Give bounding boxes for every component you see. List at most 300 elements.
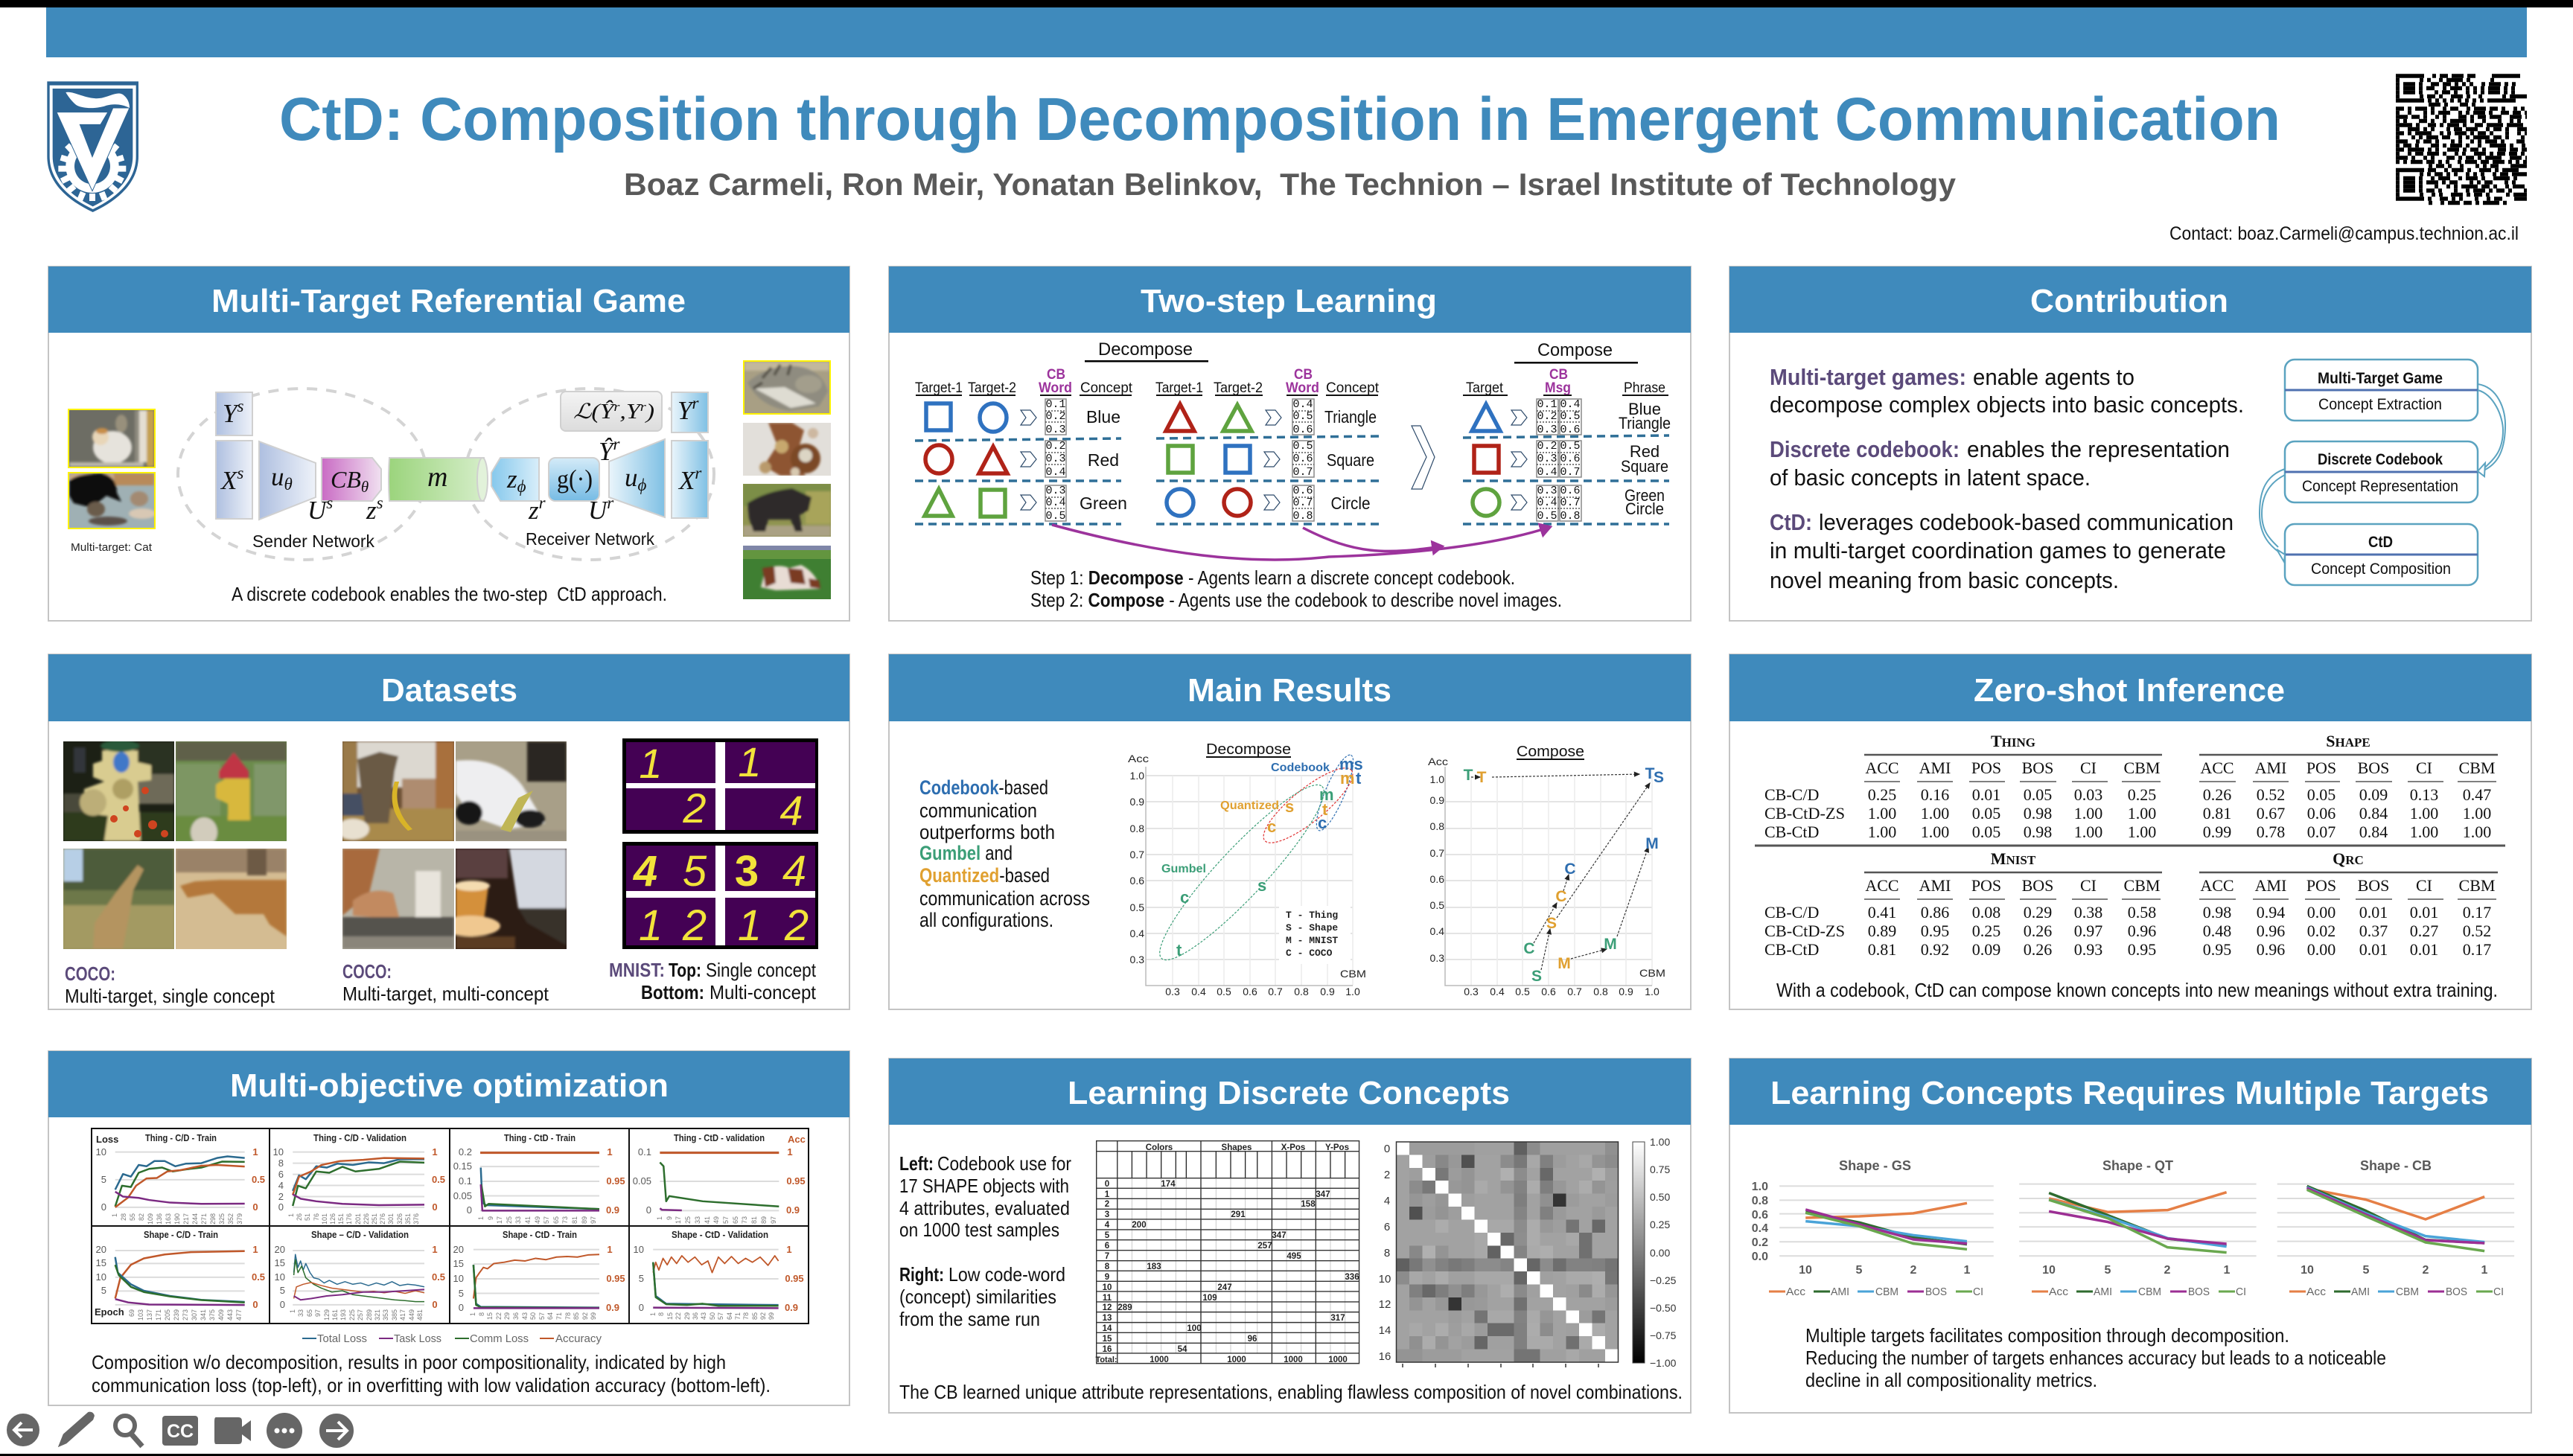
caption: COCO multi concept: [342, 960, 549, 1005]
caption: COCO single concept: COCO:: [65, 962, 115, 985]
arrow: curved flow right: [2478, 384, 2505, 476]
math labels: r: [539, 494, 546, 512]
chart image: MNIST single concept: [622, 738, 818, 834]
epoch tick labels: 1: [477, 1216, 485, 1220]
table: codebook usage: Shapes: [1222, 1143, 1252, 1152]
results table: 1.00: [2463, 823, 2491, 841]
point labels: C: [1523, 940, 1535, 957]
flow boxes: Multi-Target Game: [2318, 370, 2443, 387]
caption: COCO single concept: Multi-target, single concept: [65, 985, 275, 1007]
right axis labels: 0.9: [606, 1302, 619, 1313]
results table: BOS: [2358, 876, 2389, 895]
caption: COCO multi concept: COCO:: [342, 960, 392, 983]
results table: CBM: [2124, 759, 2160, 777]
results table: 0.95: [2203, 940, 2231, 959]
epoch tick labels: 341: [200, 1309, 207, 1321]
chart titles: [95, 1132, 806, 1318]
table: codebook usage: 9: [1105, 1273, 1109, 1282]
results table: 0.16: [1921, 785, 1949, 804]
chart: compose scatter: 0.5: [1515, 986, 1530, 997]
results table: 0.26: [2024, 922, 2052, 940]
line charts: shape GS QT CB: 0.6: [1752, 1209, 1768, 1222]
chart: compose scatter: 1.0: [1645, 986, 1659, 997]
table: codebook usage: 183: [1147, 1262, 1161, 1271]
color scale: −0.75: [1650, 1329, 1677, 1341]
chart: decompose scatter: 0.8: [1130, 823, 1144, 834]
table: codebook usage: 8: [1105, 1262, 1110, 1271]
text block: explanation: Low code-word: [948, 1263, 1065, 1286]
panel: multi-target referential game: [48, 266, 849, 621]
flow boxes: Concept Extraction: [2318, 396, 2442, 413]
text block: explanation: on 1000 test samples: [899, 1219, 1059, 1241]
right axis labels: 1: [432, 1244, 438, 1255]
chart grid frame: [92, 1128, 809, 1324]
epoch tick labels: 271: [200, 1213, 208, 1224]
icon: closed captions: [162, 1416, 198, 1446]
codebook numbers: 0.2: [1537, 440, 1557, 453]
table: codebook usage: 12: [1103, 1303, 1112, 1312]
codebook numbers: 0.2: [1045, 440, 1066, 453]
text block: explanation: (concept) similarities: [899, 1286, 1056, 1308]
chart legends: AMI: [2351, 1286, 2370, 1298]
epoch tick labels: 99: [768, 1312, 775, 1320]
photo: cow on grass: [743, 546, 831, 599]
epoch tick labels: 81: [750, 1216, 758, 1224]
right axis labels: 0.5: [432, 1271, 445, 1283]
codebook numbers: 0.2: [1045, 410, 1066, 423]
results table: 0.26: [2203, 785, 2231, 804]
line charts: shape GS QT CB: [1752, 1158, 2514, 1298]
epoch tick labels: 26: [296, 1213, 303, 1221]
chart image: MNIST multi concept: 4: [633, 847, 657, 895]
point labels: [1161, 755, 1363, 960]
epoch tick labels: 325: [218, 1213, 226, 1224]
table: codebook usage: 11: [1103, 1294, 1112, 1303]
results table: 0.52: [2257, 785, 2285, 804]
text block: result summary: communication: [919, 799, 1037, 822]
results table: 0.17: [2463, 903, 2491, 922]
text block: contributions: Discrete codebook:: [1770, 436, 1960, 462]
results table: CI: [2080, 759, 2097, 777]
results table: 0.25: [2128, 785, 2156, 804]
epoch tick labels: 176: [345, 1213, 353, 1224]
codebook numbers: 0.3: [1537, 424, 1557, 436]
color scale: −1.00: [1650, 1357, 1677, 1369]
chart legends: BOS: [1925, 1286, 1947, 1298]
left axis labels: 10: [275, 1271, 285, 1283]
left axis labels: 20: [275, 1244, 285, 1255]
chart: compose scatter: 0.9: [1619, 986, 1633, 997]
concept and phrase labels: Red: [1088, 450, 1119, 470]
concept and phrase labels: Blue: [1628, 400, 1661, 418]
results table: AMI: [1919, 759, 1951, 777]
panel: multi-objective optimization: [48, 1051, 849, 1405]
epoch tick labels: 1: [287, 1213, 295, 1217]
epoch tick labels: 17: [496, 1216, 503, 1224]
top black strip: [0, 0, 2573, 7]
icon: forward arrow: [319, 1413, 354, 1449]
results table: 0.05: [1972, 823, 2000, 841]
chart image: MNIST multi concept: 2: [784, 901, 809, 950]
heading: Two-step Learning: [1141, 283, 1437, 319]
panel: learning discrete concepts: [889, 1059, 1691, 1413]
chart legends: BOS: [2446, 1286, 2467, 1298]
results table: 0.27: [2410, 922, 2438, 940]
chart: decompose scatter: 0.9: [1130, 796, 1144, 808]
epoch tick labels: 379: [236, 1213, 243, 1224]
line charts: shape GS QT CB: 1: [2224, 1264, 2231, 1277]
table: codebook usage: 7: [1105, 1252, 1109, 1261]
left axis labels: 0.05: [453, 1190, 472, 1201]
epoch tick labels: 76: [313, 1213, 320, 1221]
column headers: Target-2: [968, 380, 1016, 396]
photo: red top hydrant: [176, 741, 287, 841]
results table: CB-CtD-ZS: [1764, 922, 1845, 940]
results table: CB-C/D: [1764, 785, 1819, 804]
right axis labels: 0.9: [786, 1204, 800, 1216]
results table: 0.84: [2359, 804, 2388, 823]
point labels: T: [1464, 767, 1473, 784]
chart: decompose scatter: 0.6: [1130, 875, 1144, 887]
left axis labels: 0.05: [633, 1175, 651, 1187]
chart image: MNIST multi concept: [622, 842, 818, 950]
icon: back arrow: [6, 1413, 40, 1447]
epoch tick labels: 82: [138, 1213, 145, 1221]
heading: Contribution: [2030, 283, 2228, 319]
left axis labels: 10: [634, 1244, 644, 1255]
results table: 0.99: [2203, 823, 2231, 841]
chart: decompose scatter: 0.9: [1320, 986, 1335, 997]
heading: Zero-shot Inference: [1974, 672, 2285, 709]
right axis labels: 0.5: [252, 1271, 265, 1283]
math labels: s: [237, 397, 243, 415]
epoch tick labels: 244: [191, 1213, 199, 1224]
table: codebook usage: 96: [1248, 1335, 1257, 1344]
epoch tick labels: 57: [538, 1312, 546, 1320]
chart: compose scatter: 0.7: [1430, 847, 1444, 859]
math labels: z: [529, 496, 539, 525]
column headers: Target-2: [1214, 380, 1263, 396]
epoch tick labels: 85: [573, 1312, 580, 1320]
chart legends: Acc: [2049, 1286, 2069, 1298]
concept and phrase labels: Green: [1080, 494, 1127, 513]
text block: result summary: all configurations.: [919, 909, 1053, 931]
point labels: S: [1531, 968, 1542, 985]
caption: decline in all compositionality metrics.: [1805, 1369, 2097, 1391]
left axis labels: 5: [280, 1285, 285, 1296]
point labels: t: [1176, 941, 1182, 960]
chart: compose scatter: 0.5: [1430, 899, 1444, 911]
color scale: −0.25: [1650, 1274, 1677, 1286]
codebook numbers: 0.6: [1292, 453, 1313, 465]
results table: MNIST: [1991, 849, 2036, 868]
flow boxes: CtD: [2368, 534, 2393, 551]
sender receiver dashed circles: [178, 389, 714, 560]
chart legends: Acc: [2306, 1286, 2327, 1298]
chart image: MNIST multi concept: 1: [639, 901, 663, 950]
results table: 0.25: [1972, 922, 2000, 940]
label: receiver network: Receiver Network: [526, 529, 654, 549]
epoch tick labels: 36: [512, 1312, 520, 1320]
results table: 0.09: [2359, 785, 2388, 804]
math labels: ϕ: [517, 477, 526, 496]
table: codebook usage: 1000: [1328, 1356, 1348, 1364]
codebook numbers: 0.8: [1560, 510, 1581, 523]
results table: 0.67: [2257, 804, 2285, 823]
right axis labels: 1: [607, 1146, 613, 1158]
heading: Multi-objective optimization: [230, 1067, 669, 1104]
codebook numbers: 0.7: [1292, 496, 1313, 509]
epoch tick labels: 417: [399, 1309, 406, 1321]
math labels: ,Y: [619, 400, 643, 424]
panel: zero-shot inference: [1729, 654, 2531, 1009]
codebook numbers: 0.4: [1045, 496, 1066, 509]
epoch tick labels: 1: [656, 1216, 663, 1220]
results table: 0.98: [2203, 903, 2231, 922]
epoch tick labels: 43: [700, 1312, 707, 1320]
table: codebook usage: 2: [1105, 1200, 1109, 1209]
codebook numbers: 0.3: [1045, 485, 1066, 497]
epoch tick labels: [111, 1213, 777, 1321]
chart: decompose scatter: 0.3: [1130, 954, 1144, 965]
table: codebook usage: 100: [1187, 1324, 1202, 1333]
codebook numbers: 0.5: [1045, 510, 1066, 523]
flow boxes: Concept Representation: [2302, 478, 2458, 495]
codebook numbers: 0.3: [1537, 453, 1557, 465]
epoch tick labels: 352: [227, 1213, 235, 1224]
chart lines: eight training curves: [115, 1152, 779, 1308]
table: codebook usage: 495: [1286, 1252, 1301, 1261]
line charts: shape GS QT CB: 0.4: [1752, 1222, 1768, 1235]
epoch tick labels: 171: [155, 1309, 162, 1321]
flow boxes: [2285, 360, 2478, 585]
chart: compose scatter: [1428, 744, 1665, 997]
point labels: T: [1477, 769, 1487, 786]
text block: explanation: 17 SHAPE objects with: [899, 1175, 1069, 1197]
color scale: 0.25: [1650, 1219, 1670, 1230]
chart: compose scatter: 0.7: [1567, 986, 1582, 997]
table: codebook usage: Y-Pos: [1325, 1143, 1349, 1152]
table: codebook usage: Total:: [1095, 1356, 1117, 1364]
column headers: Concept: [1080, 380, 1133, 396]
point labels: m: [1319, 785, 1334, 804]
results table: 0.58: [2128, 903, 2156, 922]
chart: compose scatter: 0.4: [1490, 986, 1505, 997]
right axis labels: 1: [252, 1244, 258, 1255]
epoch tick labels: 1: [469, 1312, 476, 1316]
results table: POS: [1971, 759, 2001, 777]
column headers: CB: [1549, 367, 1568, 383]
chart: decompose scatter: 0.7: [1268, 986, 1283, 997]
photo: hand on laptop: [342, 849, 454, 949]
results table: 0.29: [2024, 903, 2052, 922]
text block: result summary: Gumbel and: [919, 842, 1013, 864]
epoch tick labels: 36: [692, 1312, 699, 1320]
math labels: s: [237, 464, 243, 482]
title: CtD: Composition through Decomposition in Emergent Communication: [279, 86, 2280, 153]
chart: decompose scatter: 0.3: [1165, 986, 1180, 997]
results table: ACC: [2200, 759, 2234, 777]
point labels: M: [1645, 835, 1659, 852]
results table: 0.98: [2024, 823, 2052, 841]
codebook numbers: 0.6: [1292, 485, 1313, 497]
epoch tick labels: 190: [173, 1213, 181, 1224]
epoch tick labels: 33: [694, 1216, 701, 1224]
point labels: M: [1557, 955, 1571, 972]
results table: CBM: [2124, 876, 2160, 895]
chart image: MNIST multi concept: 2: [682, 901, 707, 950]
math labels: z: [507, 464, 517, 494]
heatmap: concept similarity: 4: [1384, 1195, 1390, 1207]
table: codebook usage: 54: [1178, 1345, 1187, 1354]
math labels: r: [607, 494, 614, 512]
chart: compose scatter: Acc: [1428, 756, 1448, 767]
codebook numbers: 0.8: [1292, 510, 1313, 523]
results table: 0.89: [1868, 922, 1896, 940]
epoch tick labels: 443: [226, 1309, 234, 1321]
chart image: MNIST multi concept: 5: [683, 847, 707, 895]
epoch tick labels: 385: [391, 1309, 398, 1321]
column headers: CB: [1047, 367, 1065, 383]
legend box: M - MNIST: [1286, 935, 1338, 946]
left axis labels: 5: [639, 1273, 644, 1284]
table: codebook usage: 3: [1105, 1210, 1109, 1219]
epoch tick labels: 101: [321, 1213, 328, 1224]
subheading: decompose: Decompose: [1098, 339, 1193, 360]
right axis labels: 1: [432, 1146, 438, 1158]
epoch tick labels: 73: [561, 1216, 569, 1224]
epoch tick labels: 65: [732, 1216, 739, 1224]
point labels: T: [1645, 765, 1655, 782]
text block: result summary: outperforms both: [919, 821, 1055, 843]
point labels: s: [1257, 876, 1266, 895]
line charts: shape GS QT CB: 0.0: [1752, 1251, 1768, 1263]
math labels: r: [695, 464, 702, 482]
epoch tick labels: 1: [649, 1312, 657, 1316]
math labels: r: [640, 400, 646, 414]
chart: decompose scatter: Acc: [1128, 753, 1149, 764]
heatmap: concept similarity: [1379, 1142, 1619, 1367]
table: codebook usage: 16: [1103, 1345, 1112, 1354]
left axis labels: 5: [101, 1174, 106, 1185]
heatmap: concept similarity: 14: [1379, 1324, 1391, 1337]
text block: explanation: from the same run: [899, 1308, 1040, 1330]
right axis labels: 0: [432, 1201, 438, 1213]
text block: explanation: [899, 1152, 1071, 1330]
epoch tick labels: 376: [412, 1213, 420, 1224]
codebook numbers: 0.4: [1537, 466, 1557, 479]
caption: A discrete codebook enables the two-step CtD approach.: [232, 583, 667, 605]
results table: 0.05: [2307, 785, 2336, 804]
column headers: CB: [1294, 367, 1313, 383]
epoch tick labels: 64: [546, 1312, 554, 1320]
results table: 0.92: [1921, 940, 1949, 959]
right axis labels: 0.95: [785, 1273, 804, 1284]
chart image: MNIST single concept: 1: [738, 738, 762, 785]
right axis labels: 0.95: [606, 1273, 625, 1284]
epoch tick labels: 22: [675, 1312, 682, 1320]
table: codebook usage: 200: [1132, 1221, 1147, 1230]
results table: 0.52: [2463, 922, 2491, 940]
left axis labels: 0: [639, 1302, 644, 1313]
epoch tick labels: 326: [396, 1213, 404, 1224]
table: codebook usage: 1000: [1227, 1356, 1246, 1364]
epoch tick labels: 69: [128, 1309, 135, 1317]
line charts: shape GS QT CB: Shape - GS: [1839, 1158, 1911, 1173]
chart: decompose scatter: 0.4: [1130, 927, 1144, 939]
text block: explanation: Right:: [899, 1263, 944, 1286]
results table: CB-CtD: [1764, 823, 1819, 841]
epoch tick labels: 78: [742, 1312, 750, 1320]
results table: 0.96: [2257, 922, 2285, 940]
results table: CB-CtD: [1764, 940, 1819, 959]
results table: 0.07: [2307, 823, 2336, 841]
chart: compose scatter: 0.3: [1464, 986, 1479, 997]
math labels: r: [692, 394, 699, 412]
right axis labels: 0.9: [606, 1204, 619, 1216]
left axis labels: 10: [96, 1146, 106, 1158]
results table: BOS: [2358, 759, 2389, 777]
codebook numbers: 0.5: [1537, 510, 1557, 523]
right axis labels: 0.95: [606, 1175, 625, 1187]
text block: contributions: novel meaning from basic concepts.: [1770, 567, 2119, 593]
results table: 1.00: [2074, 804, 2102, 823]
heading: Multi-Target Referential Game: [211, 283, 686, 319]
results table: [1755, 732, 2505, 959]
results table: 0.95: [1921, 922, 1949, 940]
panel: datasets: [48, 654, 849, 1009]
chart: decompose scatter: [1128, 741, 1366, 997]
chart: decompose scatter: 0.5: [1130, 901, 1144, 913]
color scale: 0.00: [1650, 1247, 1670, 1259]
text block: contributions: Multi-target games:: [1770, 364, 1966, 390]
chart legends: CBM: [2138, 1286, 2161, 1298]
point labels: M: [1604, 936, 1617, 953]
contact: Contact: boaz.Carmeli@campus.technion.ac.il: [2169, 223, 2519, 244]
table: codebook usage: 289: [1117, 1303, 1132, 1312]
table: codebook usage: Colors: [1146, 1143, 1173, 1152]
results table: 1.00: [1868, 823, 1896, 841]
photo: cream hydrant: [63, 741, 174, 841]
point labels: m: [1340, 769, 1355, 788]
chart legends: Acc: [1786, 1286, 1806, 1298]
epoch tick labels: 449: [408, 1309, 415, 1321]
caption: MNIST: Bottom:: [641, 981, 704, 1003]
caption: MNIST: Top:: [669, 959, 701, 981]
point labels: ms: [1339, 755, 1363, 773]
text block: contributions: enables the representation: [1967, 436, 2230, 462]
point labels: C: [1555, 888, 1567, 905]
caption: COCO multi concept: Multi-target, multi-concept: [342, 983, 549, 1005]
epoch tick labels: 41: [524, 1216, 532, 1224]
cluster outlines: [1144, 751, 1362, 974]
heatmap: concept similarity: 6: [1384, 1221, 1390, 1233]
math labels: X: [221, 466, 237, 495]
codebook numbers: 0.3: [1045, 424, 1066, 436]
right axis labels: [252, 1146, 806, 1313]
epoch tick labels: 103: [137, 1309, 144, 1321]
line charts: shape GS QT CB: 10: [2301, 1264, 2314, 1277]
codebook numbers: 0.6: [1560, 453, 1581, 465]
line charts: shape GS QT CB: 2: [1910, 1264, 1917, 1277]
chart: compose scatter: 0.6: [1541, 986, 1556, 997]
results table: ACC: [2200, 876, 2234, 895]
chart titles: Loss: [96, 1134, 118, 1145]
epoch tick labels: 73: [741, 1216, 748, 1224]
results table: 1.00: [2128, 804, 2156, 823]
caption: MNIST: [609, 959, 817, 1003]
epoch tick labels: 298: [209, 1213, 217, 1224]
